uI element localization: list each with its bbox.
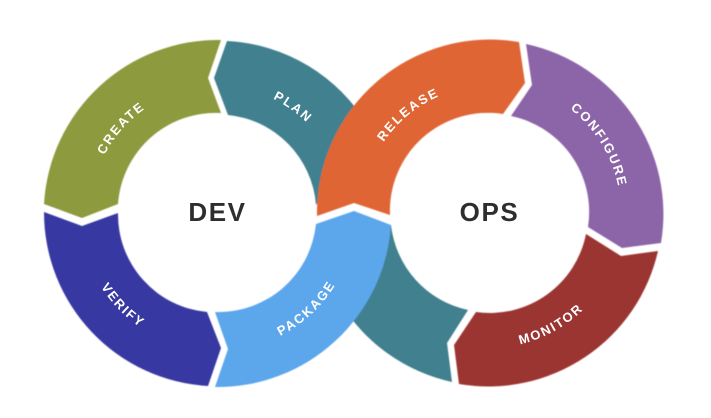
segment: verify bbox=[44, 212, 221, 386]
DEV and OPS ring segments bbox=[44, 40, 663, 387]
segment: plan bbox=[214, 41, 468, 382]
label: release: RELEASE bbox=[376, 88, 438, 142]
segment: lower teal ribbon bbox=[340, 225, 468, 382]
segment: package bbox=[215, 211, 391, 387]
segment: release bbox=[317, 40, 525, 216]
label: configure: CONFIGURE bbox=[572, 104, 627, 186]
label: plan: PLAN bbox=[274, 91, 312, 122]
label: create: CREATE bbox=[98, 102, 144, 154]
center title: DEV: DEV bbox=[188, 197, 247, 227]
label: monitor: MONITOR bbox=[518, 305, 582, 344]
segment: monitor bbox=[454, 234, 658, 386]
label: package: PACKAGE bbox=[276, 282, 334, 336]
segment: create bbox=[44, 40, 221, 218]
center title: OPS: OPS bbox=[460, 197, 519, 227]
label: verify: VERIFY bbox=[102, 282, 144, 325]
segment: configure bbox=[511, 44, 663, 248]
